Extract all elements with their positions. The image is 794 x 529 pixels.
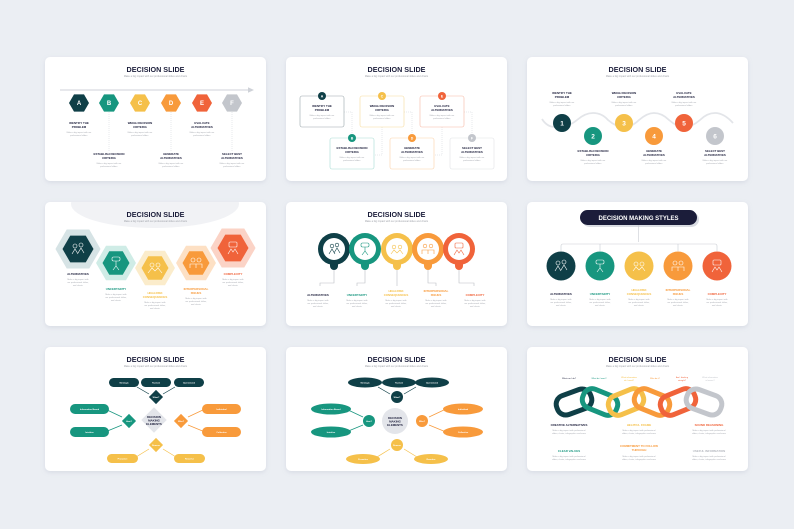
style labels: our professional slides, — [222, 281, 244, 284]
style labels: and charts. — [228, 284, 239, 287]
step labels: professional slides. — [193, 134, 211, 137]
box text: professional slides. — [343, 159, 361, 162]
title: DECISION SLIDE — [127, 355, 185, 364]
step labels: Make a big impact with our — [612, 101, 637, 104]
branch diamonds and pills: How? — [126, 421, 133, 423]
title pill — [580, 210, 699, 227]
style labels: CONSEQUENCES — [143, 295, 167, 299]
subtitle: Make a big impact with our professional slides and charts — [606, 75, 670, 78]
style labels: Make a big impact with — [550, 298, 572, 301]
step labels: professional slides. — [584, 162, 602, 165]
style labels: ALTERNATIVES — [67, 272, 89, 276]
numbered circles: 4 — [652, 133, 656, 140]
style labels: our professional slides, — [628, 301, 650, 304]
pin labels: Make a big impact with — [464, 299, 486, 302]
style labels: our professional slides, — [105, 296, 127, 299]
style labels: COMPLEXITY — [708, 292, 726, 296]
center circle: ELEMENTS — [387, 423, 403, 427]
branch circles and ellipses: Proactive — [358, 458, 369, 461]
step labels: ALTERNATIVES — [191, 125, 213, 129]
subtitle: Make a big impact with our professional slides and charts — [124, 365, 188, 368]
hexagons A-F: F — [230, 101, 234, 107]
style labels: and charts. — [673, 304, 684, 307]
branch diamonds and pills: Proactive — [118, 458, 128, 460]
subtitle: Make a big impact with our professional slides and charts — [124, 75, 188, 78]
branch diamonds and pills: Tactical — [152, 382, 160, 384]
step labels: professional slides. — [645, 162, 663, 165]
numbered circles: 1 — [560, 120, 564, 127]
pin labels: and charts. — [470, 305, 481, 308]
box text: Make a big impact with our — [430, 114, 455, 117]
question labels: Who do it? — [650, 377, 661, 380]
step labels: professional slides. — [553, 104, 571, 107]
pin labels — [307, 289, 486, 308]
pin labels: our professional slides, — [425, 302, 447, 305]
text blocks: Make a big impact with professional — [623, 455, 656, 458]
center diamond — [141, 407, 167, 433]
box text: Make a big impact with our — [460, 156, 485, 159]
step labels: PROBLEM — [72, 125, 87, 129]
branch diamonds and pills: Reason — [152, 445, 161, 447]
step labels: EVALUATE — [676, 91, 692, 95]
box text: CRITERIA — [345, 150, 360, 154]
style labels — [550, 288, 728, 307]
step labels — [550, 91, 728, 165]
arrow — [60, 87, 254, 93]
step labels: professional slides. — [223, 165, 241, 168]
box text: EVALUATE — [434, 104, 450, 108]
branch circles and ellipses: Information Based — [321, 408, 341, 411]
style labels: ISSUES — [673, 292, 683, 296]
pin labels: Make a big impact with — [346, 299, 368, 302]
style labels: and charts. — [595, 304, 606, 307]
step labels: Make a big impact with our — [159, 162, 184, 165]
pin labels: Make a big impact with — [425, 299, 447, 302]
box text: professional slides. — [433, 117, 451, 120]
pin labels: and charts. — [431, 305, 442, 308]
step labels: IDENTIFY THE — [69, 121, 89, 125]
style labels: ISSUES — [191, 291, 201, 295]
step labels: Make a big impact with our — [190, 131, 215, 134]
branch diamonds and pills: Reactive — [185, 458, 195, 460]
center circle: MAKING — [389, 420, 402, 424]
style labels: Make a big impact with — [67, 278, 89, 281]
branch circles and ellipses: Who? — [419, 421, 426, 423]
step labels: GENERATE — [163, 152, 179, 156]
branch circles and ellipses: Operational — [426, 382, 438, 384]
center diamond: ELEMENTS — [146, 422, 162, 426]
step labels: professional slides. — [706, 162, 724, 165]
step labels: Make a big impact with our — [97, 162, 122, 165]
style labels: HIGH-RISK — [631, 288, 647, 292]
pin labels: our professional slides, — [307, 302, 329, 305]
pin labels: INTERPERSONAL — [424, 289, 449, 293]
center diamond: MAKING — [148, 418, 161, 422]
step labels: CRITERIA — [133, 125, 148, 129]
question labels: What information — [621, 376, 638, 379]
box text: WEIGH DECISION — [370, 104, 394, 108]
question labels: What can I do? — [562, 377, 577, 380]
step labels: CRITERIA — [586, 153, 601, 157]
title: DECISION SLIDE — [609, 355, 667, 364]
box text: GENERATE — [404, 146, 420, 150]
subtitle: Make a big impact with our professional slides and charts — [365, 75, 429, 78]
pin labels: and charts. — [391, 305, 402, 308]
hexagons A-F: D — [169, 101, 174, 107]
slide 9: chain links — [527, 347, 748, 471]
style labels: and charts. — [634, 304, 645, 307]
title pill: DECISION MAKING STYLES — [598, 216, 679, 222]
branch diamonds and pills: Information Based — [80, 408, 100, 411]
style labels: our professional slides, — [550, 301, 572, 304]
slide 8: circle mind map — [286, 347, 507, 471]
style labels: and charts. — [712, 304, 723, 307]
style labels: INTERPERSONAL — [666, 288, 691, 292]
numbered circles: 2 — [591, 133, 595, 140]
branch circles and ellipses: How? — [366, 421, 373, 423]
step labels: professional slides. — [162, 165, 180, 168]
branch diamonds and pills: Operational — [183, 382, 195, 384]
style labels: INTERPERSONAL — [184, 287, 209, 291]
branch diamonds and pills — [70, 378, 241, 463]
subtitle: Make a big impact with our professional slides and charts — [365, 220, 429, 223]
text blocks: slides, charts, infographics and more — [552, 432, 587, 435]
pin labels: COMPLEXITY — [466, 293, 484, 297]
style labels: our professional slides, — [706, 301, 728, 304]
step labels: ESTABLISH DECISION — [578, 149, 608, 153]
text blocks: Make a big impact with professional — [553, 429, 586, 432]
box text: Make a big impact with our — [340, 156, 365, 159]
step labels: professional slides. — [615, 104, 633, 107]
center circle — [382, 408, 408, 434]
branch circles and ellipses: Collective — [458, 431, 469, 434]
style labels: UNCERTAINTY — [590, 292, 610, 296]
box text: professional slides. — [403, 159, 421, 162]
style labels: our professional slides, — [185, 300, 207, 303]
letter badges: C — [381, 94, 384, 98]
pin labels: Make a big impact with — [385, 299, 407, 302]
branch diamonds and pills: What? — [153, 396, 160, 399]
step labels: ALTERNATIVES — [221, 156, 243, 160]
pin labels: ALTERNATIVES — [307, 293, 329, 297]
text blocks: Make a big impact with professional — [553, 455, 586, 458]
branch diamonds and pills: Intuitive — [85, 431, 94, 434]
subtitle: Make a big impact with our professional slides and charts — [606, 365, 670, 368]
title: DECISION SLIDE — [368, 355, 426, 364]
box text: ALTERNATIVES — [401, 150, 423, 154]
step boxes — [300, 96, 494, 169]
style labels: Make a big impact with — [105, 293, 127, 296]
branch circles and ellipses: What? — [394, 396, 401, 399]
style labels: and charts. — [111, 299, 122, 302]
style labels: Make a big impact with — [667, 298, 689, 301]
style labels: CONSEQUENCES — [627, 292, 651, 296]
text blocks: slides, charts, infographics and more — [552, 458, 587, 461]
style labels: and charts. — [150, 307, 161, 310]
step labels: Make a big impact with our — [703, 159, 728, 162]
box text: professional slides. — [463, 159, 481, 162]
hexagons A-F: B — [107, 101, 112, 107]
box text: professional slides. — [373, 117, 391, 120]
style labels: our professional slides, — [667, 301, 689, 304]
style labels: our professional slides, — [144, 304, 166, 307]
letter badges: B — [351, 136, 354, 140]
slide 1: lettered hexagon timeline — [45, 57, 266, 181]
step labels: ESTABLISH DECISION — [94, 152, 124, 156]
text blocks: Make a big impact with professional — [693, 455, 726, 458]
chain — [554, 386, 724, 418]
subtitle: Make a big impact with our professional slides and charts — [365, 365, 429, 368]
numbered circles: 5 — [682, 120, 686, 127]
question labels — [562, 376, 719, 382]
letter badges: E — [441, 94, 444, 98]
text blocks: THROUGH — [632, 448, 646, 452]
box text — [310, 104, 485, 162]
box text: CRITERIA — [375, 108, 390, 112]
style labels: Make a big impact with — [589, 298, 611, 301]
question labels: Am I thinking — [676, 376, 689, 379]
step labels: CRITERIA — [102, 156, 117, 160]
pin labels: and charts. — [352, 305, 363, 308]
question labels: What do I want? — [591, 377, 607, 380]
hexagons with icons — [60, 233, 250, 281]
step labels: WEIGH DECISION — [612, 91, 636, 95]
branch circles and ellipses: Individual — [458, 409, 468, 411]
style labels: Make a big impact with — [185, 297, 207, 300]
box text: Make a big impact with our — [310, 114, 335, 117]
step labels: professional slides. — [70, 134, 88, 137]
style labels: COMPLEXITY — [224, 272, 242, 276]
text blocks: USEFUL INFORMATION — [693, 449, 725, 453]
step labels: IDENTIFY THE — [552, 91, 572, 95]
text blocks: COMMITMENT TO FOLLOW — [620, 444, 658, 448]
letter badges: D — [411, 136, 414, 140]
style labels: our professional slides, — [589, 301, 611, 304]
step labels: Make a big impact with our — [642, 159, 667, 162]
branch diamonds and pills: Who? — [178, 421, 185, 423]
step labels: Make a big impact with our — [581, 159, 606, 162]
branch circles and ellipses: Strategic — [360, 382, 370, 384]
pin labels: our professional slides, — [464, 302, 486, 305]
style labels: and charts. — [191, 303, 202, 306]
style labels: Make a big impact with — [706, 298, 728, 301]
style labels — [67, 272, 244, 310]
style labels: our professional slides, — [67, 281, 89, 284]
slide 3: numbered wave — [527, 57, 748, 181]
style labels: Make a big impact with — [222, 278, 244, 281]
branch diamonds and pills: Individual — [216, 409, 227, 411]
numbered circles: 6 — [713, 133, 717, 140]
step labels: PROBLEM — [555, 95, 570, 99]
title: DECISION SLIDE — [609, 65, 667, 74]
text blocks: slides, charts, infographics and more — [622, 458, 657, 461]
style circles — [546, 252, 732, 280]
text blocks: CLEAR VALUES — [558, 449, 580, 453]
step labels: professional slides. — [100, 165, 118, 168]
step labels: professional slides. — [675, 104, 693, 107]
slide 6: decision making styles tree — [527, 202, 748, 326]
question labels: do I need? — [624, 380, 635, 382]
subtitle: Make a big impact with our professional slides and charts — [124, 220, 188, 223]
hexagons A-F — [69, 94, 242, 112]
text blocks: slides, charts, infographics and more — [692, 458, 727, 461]
hexagons A-F: A — [77, 101, 82, 107]
branch diamonds and pills: Collective — [216, 431, 227, 434]
box text: Make a big impact with our — [370, 114, 395, 117]
slide 4: hexagon styles — [44, 202, 266, 328]
question labels: straight? — [678, 379, 687, 382]
pin labels: our professional slides, — [346, 302, 368, 305]
letter badges: F — [471, 136, 474, 140]
step labels: SELECT BEST — [222, 152, 242, 156]
style labels: ALTERNATIVES — [550, 292, 572, 296]
box text: IDENTIFY THE — [312, 104, 332, 108]
step labels: SELECT BEST — [705, 149, 725, 153]
hexagons A-F: C — [138, 101, 143, 107]
box text: ALTERNATIVES — [461, 150, 483, 154]
numbered circles — [553, 114, 724, 145]
box text: Make a big impact with our — [400, 156, 425, 159]
question labels: is known? — [705, 380, 715, 382]
center diamond: DECISION — [147, 415, 161, 419]
pin labels: ISSUES — [431, 293, 441, 297]
style labels: HIGH-RISK — [147, 291, 163, 295]
branch circles and ellipses: Intuitive — [327, 431, 336, 434]
step labels: Make a big impact with our — [672, 101, 697, 104]
text blocks: slides, charts, infographics and more — [622, 432, 657, 435]
slide 5: pin circles — [286, 202, 507, 326]
step labels: ALTERNATIVES — [673, 95, 695, 99]
branch circles and ellipses: Tactical — [395, 382, 403, 384]
text blocks — [551, 423, 727, 461]
step labels: CRITERIA — [617, 95, 632, 99]
text blocks: CREATIVE ALTERNATIVES — [551, 423, 587, 427]
box text: PROBLEM — [315, 108, 330, 112]
title: DECISION SLIDE — [127, 210, 185, 219]
center circle: DECISION — [388, 416, 402, 420]
text blocks: Make a big impact with professional — [623, 429, 656, 432]
box text: SELECT BEST — [462, 146, 482, 150]
step labels: Make a big impact with our — [220, 162, 245, 165]
step labels: ALTERNATIVES — [643, 153, 665, 157]
pin labels: Make a big impact with — [307, 299, 329, 302]
pin labels: our professional slides, — [385, 302, 407, 305]
pin labels: UNCERTAINTY — [347, 293, 367, 297]
step labels: Make a big impact with our — [128, 131, 153, 134]
slide 7: diamond mind map — [45, 347, 266, 471]
text blocks: SOUND REASONING — [695, 423, 724, 427]
pins — [318, 233, 475, 270]
step labels: Make a big impact with our — [550, 101, 575, 104]
branch circles and ellipses — [311, 378, 483, 464]
style labels: and charts. — [556, 304, 567, 307]
text blocks: HELPFUL FRAME — [627, 423, 651, 427]
branch diamonds and pills: Strategic — [119, 382, 129, 384]
title: DECISION SLIDE — [368, 65, 426, 74]
style labels: Make a big impact with — [144, 301, 166, 304]
style labels: Make a big impact with — [628, 298, 650, 301]
step labels: ALTERNATIVES — [704, 153, 726, 157]
title: DECISION SLIDE — [127, 65, 185, 74]
branch circles and ellipses: Reactive — [426, 458, 436, 461]
step labels: professional slides. — [131, 134, 149, 137]
step labels: Make a big impact with our — [67, 131, 92, 134]
text blocks: slides, charts, infographics and more — [692, 432, 727, 435]
slide 2: boxed steps — [286, 57, 507, 181]
step labels: WEIGH DECISION — [128, 121, 152, 125]
style labels: and charts. — [73, 284, 84, 287]
text blocks: Make a big impact with professional — [693, 429, 726, 432]
step labels: ALTERNATIVES — [160, 156, 182, 160]
pin labels: and charts. — [313, 305, 324, 308]
box text: ESTABLISH DECISION — [337, 146, 367, 150]
numbered circles: 3 — [622, 120, 626, 127]
box text: ALTERNATIVES — [431, 108, 453, 112]
pin labels: CONSEQUENCES — [384, 293, 408, 297]
hexagons A-F: E — [200, 101, 204, 107]
step labels: EVALUATE — [194, 121, 210, 125]
question labels: What information — [702, 376, 719, 379]
box text: professional slides. — [313, 117, 331, 120]
style labels: UNCERTAINTY — [106, 287, 126, 291]
letter badges — [318, 92, 476, 142]
branch circles and ellipses: Reason — [393, 445, 402, 447]
step labels — [67, 121, 245, 168]
pin labels: HIGH-RISK — [388, 289, 404, 293]
title: DECISION SLIDE — [368, 210, 426, 219]
step labels: GENERATE — [646, 149, 662, 153]
letter badges: A — [321, 94, 324, 98]
